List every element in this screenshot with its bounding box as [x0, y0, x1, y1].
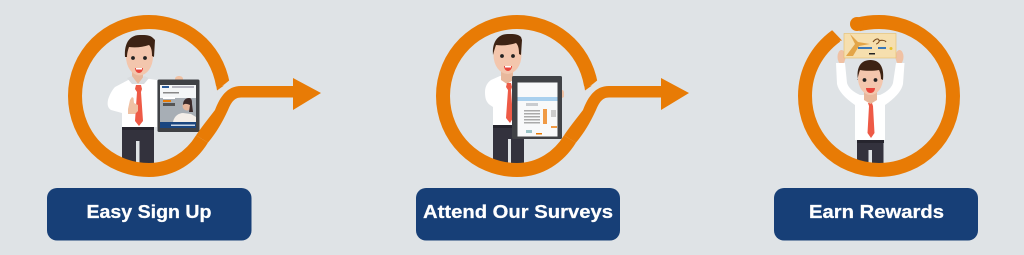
arrow: orange ring flowing into arrow [75, 22, 321, 170]
icon: man holding tablet with survey [485, 34, 564, 166]
step 2: attend our surveys [416, 22, 689, 240]
icon: man holding tablet with sign-up page [108, 35, 200, 166]
icon: tablet [512, 76, 562, 139]
arrow: orange ring flowing into arrow [443, 22, 689, 170]
button: attend our surveys: Attend Our Surveys [423, 201, 613, 222]
icon: tablet [158, 80, 200, 132]
button: easy sign up [47, 188, 252, 240]
ring: orange open circle [805, 17, 953, 170]
button: earn rewards: Earn Rewards [809, 201, 944, 222]
step 1: easy sign up [47, 22, 321, 240]
button: attend our surveys [416, 188, 620, 240]
button: easy sign up: Easy Sign Up [86, 201, 212, 222]
icon: gift card [844, 34, 896, 58]
icon: man raising gift card [836, 34, 904, 166]
button: earn rewards [774, 188, 978, 240]
step 3: earn rewards [774, 17, 978, 240]
